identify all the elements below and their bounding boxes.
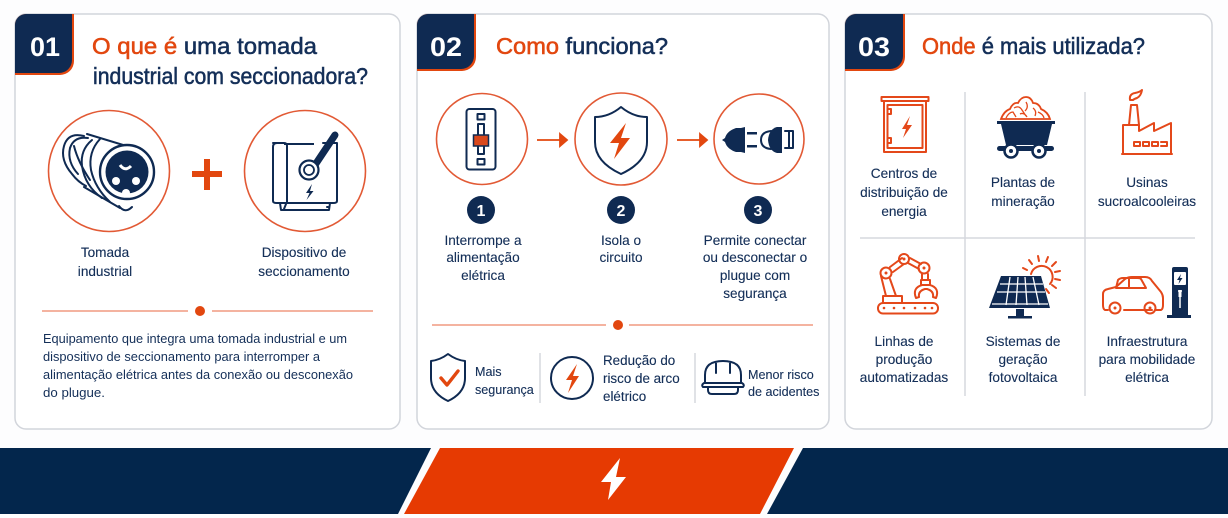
step 3 text: segurança <box>723 286 787 301</box>
benefit: arco elétrico: elétrico <box>603 389 646 404</box>
label: sistemas: geração <box>998 352 1048 367</box>
step 2 text: Isola o <box>601 233 641 248</box>
label: dispositivo: Dispositivo de <box>262 245 346 260</box>
label: centros: distribuição de <box>860 185 948 200</box>
band: centre orange <box>404 448 794 514</box>
label: tomada: Tomada <box>81 245 130 260</box>
step 2 number: 2 <box>617 203 626 220</box>
label: sistemas: fotovoltaica <box>989 370 1058 385</box>
arrow 2 <box>677 134 707 146</box>
step 1 number <box>467 196 495 224</box>
footer band <box>0 448 1228 514</box>
step 1 text: elétrica <box>461 268 505 283</box>
step 1 text: alimentação <box>446 250 520 265</box>
text block: descrição: alimentação elétrica antes da conexão ou desconexão <box>43 367 353 382</box>
label: infraestrutura: Infraestrutura <box>1107 334 1188 349</box>
benefit: arco elétrico: risco de arco <box>603 371 680 386</box>
icon: solar panel <box>989 256 1060 318</box>
label: infraestrutura: elétrica <box>1125 370 1169 385</box>
label: tomada: industrial <box>78 264 132 279</box>
icon: robot arm <box>878 254 938 314</box>
icon: cabinet <box>882 97 928 152</box>
label: usinas: sucroalcooleiras <box>1098 194 1196 209</box>
step 3 text: Permite conectar <box>704 233 807 248</box>
icon: electric car <box>1103 267 1191 318</box>
label: centros: Centros de <box>871 166 937 181</box>
step 1 number: 1 <box>477 203 486 220</box>
heading 03: Onde é mais utilizada? <box>922 33 1145 59</box>
label: plantas: Plantas de <box>991 175 1055 190</box>
benefit: mais segurança: segurança <box>475 383 534 397</box>
icon: footer bolt <box>601 458 626 500</box>
panel: como funciona <box>417 14 829 429</box>
benefit: acidentes: Menor risco <box>748 368 814 382</box>
icon: mine cart <box>997 97 1055 158</box>
step 3 number: 3 <box>754 203 763 220</box>
heading 01: O que é uma tomada <box>92 33 317 59</box>
badge 02 <box>417 14 476 71</box>
badge 03 <box>845 14 905 71</box>
label: centros: energia <box>881 204 927 219</box>
icon: tomada industrial <box>48 110 170 232</box>
step 2 icon: shield <box>575 93 667 185</box>
step 3 number <box>744 196 772 224</box>
heading 02: Como funciona? <box>496 33 668 59</box>
text block: descrição: do plugue. <box>43 385 105 400</box>
heading 01 second line: industrial com seccionadora? <box>93 63 368 89</box>
arrow 1 <box>537 134 567 146</box>
step 1 text: Interrompe a <box>444 233 522 248</box>
benefit: acidentes: de acidentes <box>748 385 819 399</box>
step 3 text: plugue com <box>720 268 790 283</box>
icon: plus <box>192 159 222 190</box>
label: linhas: automatizadas <box>860 370 948 385</box>
icon: factory <box>1122 90 1172 154</box>
step 2 number <box>607 196 635 224</box>
step 2 text: circuito <box>599 250 643 265</box>
step 3 text: ou desconectar o <box>703 250 807 265</box>
label: dispositivo: seccionamento <box>258 264 350 279</box>
badge 02: 02 <box>430 32 462 62</box>
panel: onde é mais utilizada <box>845 14 1212 429</box>
icon: dispositivo de seccionamento <box>244 110 366 232</box>
label: sistemas: Sistemas de <box>986 334 1060 349</box>
badge 01 <box>15 14 74 75</box>
label: infraestrutura: para mobilidade <box>1099 352 1195 367</box>
band: right navy <box>767 448 1228 514</box>
benefit: arco elétrico: Redução do <box>603 353 675 368</box>
benefit: arco elétrico <box>551 353 680 404</box>
benefit: mais segurança: Mais <box>475 365 502 379</box>
step 1 icon: switch <box>436 94 528 184</box>
step 3 icon: plug <box>714 94 804 184</box>
benefit: acidentes <box>702 361 819 399</box>
label: linhas: produção <box>876 352 932 367</box>
band: left navy <box>0 448 431 514</box>
benefit: mais segurança <box>431 354 534 401</box>
text block: descrição: dispositivo de seccionamento para interromper a <box>43 349 321 364</box>
badge 03: 03 <box>858 32 890 62</box>
badge 01: 01 <box>30 32 60 62</box>
label: plantas: mineração <box>991 194 1055 209</box>
panel: o que é <box>15 14 400 429</box>
text block: descrição: Equipamento que integra uma tomada industrial e um <box>43 331 347 346</box>
label: usinas: Usinas <box>1126 175 1168 190</box>
label: linhas: Linhas de <box>875 334 933 349</box>
